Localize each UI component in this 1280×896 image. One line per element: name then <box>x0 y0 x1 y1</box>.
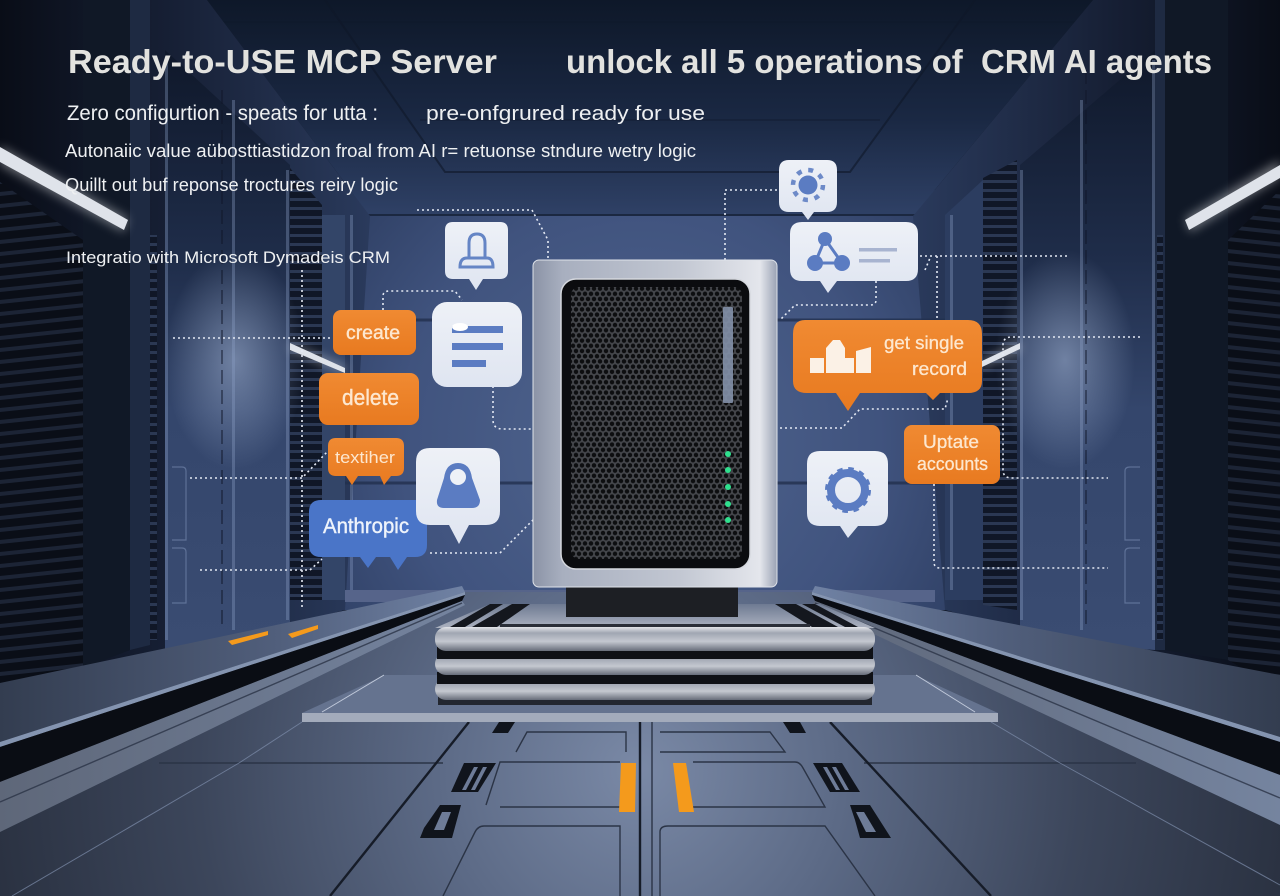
feature text block: Integratio with Microsoft Dymadeis CRM <box>66 248 390 267</box>
status LEDs <box>725 451 731 523</box>
card: Update accounts: Uptate <box>923 432 979 452</box>
card: create: create <box>346 323 400 344</box>
card: get single record: get single <box>884 333 964 353</box>
card: get single record <box>793 320 982 411</box>
icon card: gear <box>807 451 888 538</box>
dotted connectors <box>173 190 1140 610</box>
card: Anthropic: Anthropic <box>323 515 409 538</box>
card: delete: delete <box>342 385 399 410</box>
card: Update accounts: accounts <box>917 454 988 474</box>
floor orange accent lights <box>228 625 694 812</box>
icon card: lock <box>416 448 500 544</box>
card: textiher: textiher <box>335 448 395 467</box>
feature text block <box>65 102 705 267</box>
title: Ready-to-USE MCP Server <box>68 43 497 80</box>
icon card: bell <box>445 222 508 290</box>
icon card: list lines <box>432 302 522 387</box>
ceiling and wall light strips <box>0 146 1280 374</box>
title <box>68 43 1212 80</box>
card: delete <box>319 373 419 425</box>
icon card: network graph <box>790 222 918 293</box>
card: Anthropic <box>309 500 427 570</box>
server platform <box>302 604 998 722</box>
feature text block: Autonaiic value aübosttiastidzon froal from AI r= retuonse stndure wetry logic <box>65 141 696 161</box>
server stand <box>566 586 738 617</box>
feature text block: Zero configurtion - speats for utta : <box>67 102 378 125</box>
icon card: sun <box>779 160 837 220</box>
feature text block: pre-onfgrured ready for use <box>426 103 705 125</box>
feature text block: Quillt out buf reponse troctures reiry logic <box>65 175 398 195</box>
title: unlock all 5 operations of CRM AI agents <box>566 43 1212 80</box>
card: Update accounts <box>904 425 1000 484</box>
card: get single record: record <box>912 359 967 379</box>
card: textiher <box>328 438 404 485</box>
card: create <box>333 310 416 355</box>
server unit <box>533 260 777 587</box>
